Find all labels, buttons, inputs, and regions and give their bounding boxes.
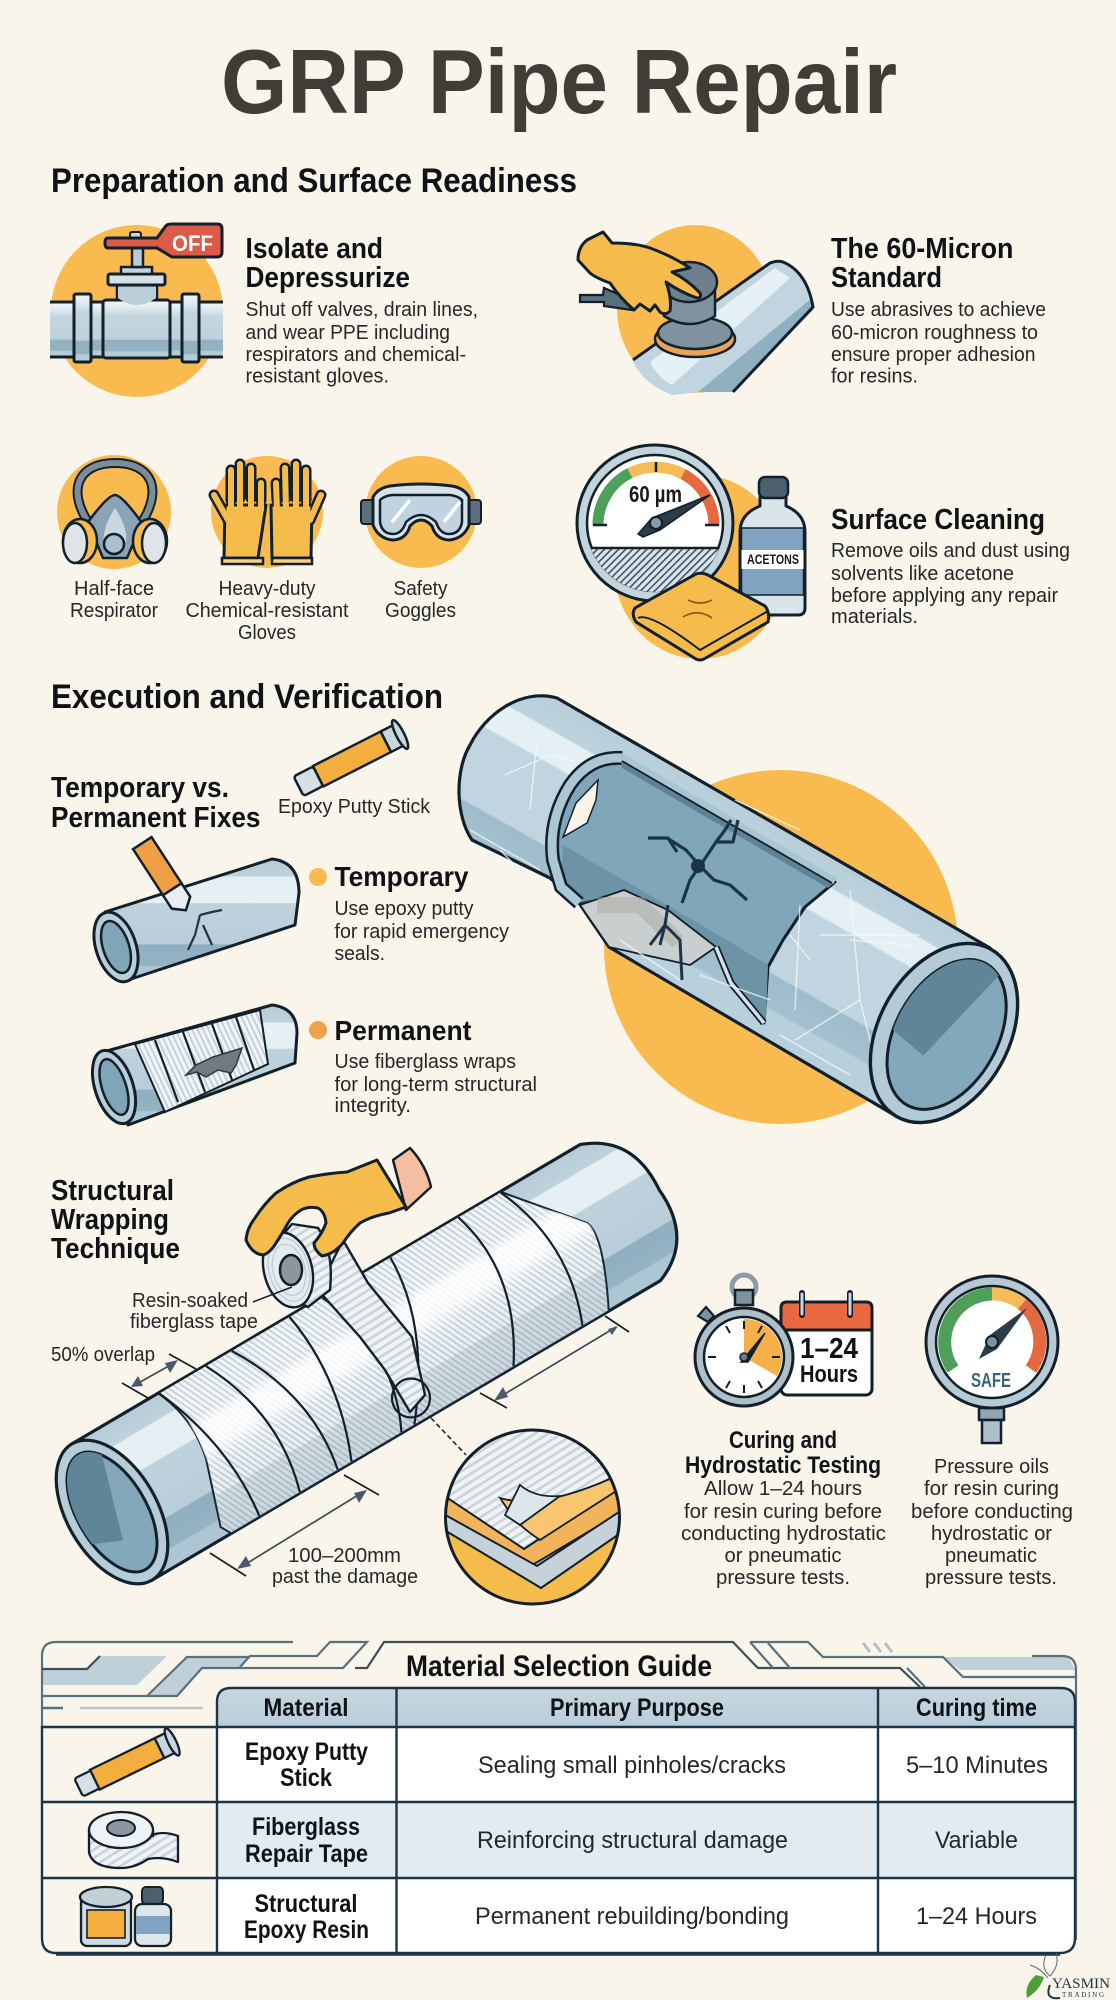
- text: the 60-micron standard: for resins.: [831, 366, 918, 388]
- crack: [648, 820, 747, 903]
- table row: fiberglass repair tape: Fiberglass: [252, 1813, 360, 1841]
- heading: structural wrapping technique: Structural: [51, 1175, 174, 1207]
- icon: calendar 1-24 hours: [781, 1293, 872, 1395]
- gloved hand: [246, 1148, 431, 1256]
- callouts: wrapping dimensions: fiberglass tape: [130, 1311, 258, 1333]
- text: permanent: Permanent: [334, 1015, 472, 1046]
- table body: [42, 1688, 1075, 1954]
- icon: calendar 1-24 hours: 1–24: [800, 1333, 858, 1365]
- text: the 60-micron standard: Use abrasives to achieve: [831, 299, 1046, 321]
- text: curing and hydrostatic testing: for resin curing before: [684, 1501, 882, 1523]
- tape roll: [256, 1224, 331, 1313]
- text: permanent: Use fiberglass wraps: [334, 1051, 516, 1073]
- panel: PPE: [57, 455, 481, 644]
- text: pressure tests: hydrostatic or: [931, 1523, 1052, 1545]
- label: epoxy putty stick: Epoxy Putty Stick: [278, 796, 431, 818]
- heading: structural wrapping technique: Wrapping: [51, 1204, 169, 1236]
- detail inset: layers: [440, 1430, 625, 1610]
- text: pressure tests: before conducting: [911, 1501, 1073, 1523]
- table row: structural epoxy resin: [244, 1890, 1037, 1944]
- panel: material selection guide table: [42, 1642, 1076, 1954]
- labels: PPE items: [70, 578, 456, 644]
- heading: structural wrapping technique: Technique: [51, 1233, 180, 1265]
- logo: yasmin trading: TRADING: [1062, 1991, 1104, 1999]
- text: isolate and depressurize: resistant gloves.: [246, 366, 389, 388]
- icon: resin jar and bottle: [80, 1887, 171, 1946]
- labels: PPE items: Gloves: [238, 622, 296, 644]
- table title: Material Selection Guide: [406, 1650, 712, 1683]
- text: the 60-micron standard: 60-micron roughness to: [831, 322, 1038, 344]
- text: surface cleaning: solvents like acetone: [831, 563, 1014, 585]
- icon: sander on pipe: [578, 225, 813, 395]
- heading: structural wrapping technique: [51, 1175, 180, 1265]
- labels: PPE items: Safety: [394, 578, 448, 600]
- orange backdrop circle: [604, 770, 958, 1124]
- panel: structural wrapping technique: [51, 1142, 678, 1606]
- text: the 60-micron standard: Standard: [831, 262, 942, 294]
- text: pressure tests: for resin curing: [924, 1478, 1059, 1500]
- table row: epoxy putty stick: Sealing small pinholes/cracks: [478, 1752, 786, 1779]
- panel: cracked pipe cutaway: [459, 696, 1048, 1149]
- table text: header row: Material: [264, 1694, 348, 1722]
- text: isolate and depressurize: Isolate and: [246, 233, 383, 265]
- table row: epoxy putty stick: [245, 1738, 1048, 1792]
- table row: structural epoxy resin: 1–24 Hours: [916, 1903, 1037, 1930]
- text: temporary: [309, 861, 509, 965]
- text: permanent: [309, 1015, 537, 1117]
- text: temporary: for rapid emergency: [334, 921, 509, 943]
- text: isolate and depressurize: and wear PPE including: [246, 322, 450, 344]
- heading: temporary vs permanent: [51, 772, 260, 834]
- table text: header row: Curing time: [916, 1694, 1037, 1722]
- callouts: wrapping dimensions: past the damage: [272, 1566, 418, 1588]
- icon: gauge, acetone bottle and cloth: 60 µm: [629, 481, 682, 507]
- icon: pipe with epoxy putty: [86, 837, 299, 987]
- text: isolate and depressurize: Depressurize: [246, 262, 410, 294]
- icon: epoxy putty stick: [291, 718, 411, 800]
- logo: yasmin trading: YASMIN: [1052, 1976, 1110, 1992]
- panel: curing and hydrostatic testing: [681, 1275, 1073, 1589]
- table row: fiberglass repair tape: Reinforcing structural damage: [477, 1827, 788, 1854]
- wrapped pipe: [54, 1142, 678, 1586]
- labels: PPE items: Chemical-resistant: [186, 600, 349, 622]
- panel: the 60-micron standard: [578, 225, 1046, 395]
- labels: PPE items: Half-face: [74, 578, 154, 600]
- icon: safety goggles: [361, 456, 481, 568]
- table row: structural epoxy resin: Permanent rebuilding/bonding: [475, 1903, 789, 1930]
- callouts: wrapping dimensions: 100–200mm: [288, 1545, 401, 1567]
- heading: temporary vs permanent: Permanent Fixes: [51, 802, 260, 834]
- labels: PPE items: Respirator: [70, 600, 158, 622]
- icon: half-face respirator: [57, 455, 171, 569]
- table row: fiberglass repair tape: [245, 1813, 1018, 1868]
- callouts: wrapping dimensions: [51, 1287, 629, 1588]
- text: isolate and depressurize: respirators and chemical-: [246, 344, 466, 366]
- table row: epoxy putty stick: Stick: [280, 1764, 332, 1792]
- panel: isolate and depressurize: [50, 224, 478, 397]
- text: temporary: Use epoxy putty: [334, 898, 474, 920]
- table text: header row: [264, 1694, 1037, 1722]
- text: pressure tests: [911, 1456, 1073, 1589]
- icon: fiberglass tape roll: [89, 1812, 178, 1868]
- heading: preparation and surface readiness: Preparation and Surface Readiness: [51, 162, 577, 200]
- text: curing and hydrostatic testing: Allow 1–24 hours: [704, 1478, 862, 1500]
- icon: stopwatch: [695, 1275, 793, 1406]
- text: the 60-micron standard: ensure proper adhesion: [831, 344, 1036, 366]
- text: pressure tests: Pressure oils: [934, 1456, 1049, 1478]
- cutaway window: [550, 757, 835, 1023]
- icon: gauge, acetone bottle and cloth: ACETONS: [747, 552, 799, 567]
- text: permanent: for long-term structural: [334, 1074, 537, 1096]
- text: curing and hydrostatic testing: pressure tests.: [716, 1567, 850, 1589]
- text: curing and hydrostatic testing: [681, 1427, 886, 1589]
- icon: pressure gauge safe: SAFE: [971, 1370, 1011, 1392]
- table row: epoxy putty stick: Epoxy Putty: [245, 1738, 368, 1766]
- icon: gauge, acetone bottle and cloth: [577, 445, 805, 660]
- table row: fiberglass repair tape: Repair Tape: [245, 1840, 368, 1868]
- labels: PPE items: Goggles: [385, 600, 456, 622]
- callouts: wrapping dimensions: 50% overlap: [51, 1344, 155, 1366]
- icon: chemical-resistant gloves: [211, 456, 323, 568]
- text: pressure tests: pneumatic: [945, 1545, 1037, 1567]
- panel: surface cleaning: [577, 445, 1070, 660]
- icon: pipe with fiberglass wrap: [84, 1005, 297, 1129]
- text: curing and hydrostatic testing: conducting hydrostatic: [681, 1523, 886, 1545]
- pipe body: [459, 696, 990, 1116]
- icon: calendar 1-24 hours: Hours: [800, 1361, 858, 1388]
- callouts: wrapping dimensions: Resin-soaked: [132, 1290, 248, 1312]
- text: surface cleaning: before applying any repair: [831, 585, 1058, 607]
- text: surface cleaning: Surface Cleaning: [831, 504, 1045, 536]
- text: the 60-micron standard: The 60-Micron: [831, 233, 1014, 265]
- text: surface cleaning: Remove oils and dust using: [831, 540, 1070, 562]
- table header decoration: [42, 1642, 1076, 1940]
- icon: epoxy stick: [72, 1727, 182, 1801]
- icon: shut-off valve: [50, 224, 223, 397]
- fiber scratches: [470, 740, 920, 1075]
- logo: yasmin trading: [1026, 1953, 1110, 1999]
- heading: execution and verification: Execution and Verification: [51, 678, 443, 716]
- tape strip unrolling from roll: [318, 1240, 425, 1412]
- text: curing and hydrostatic testing: Curing and: [729, 1427, 837, 1454]
- text: temporary: Temporary: [334, 861, 469, 892]
- table row: structural epoxy resin: Epoxy Resin: [244, 1916, 369, 1944]
- title: GRP Pipe Repair: [221, 32, 897, 133]
- text: the 60-micron standard: [831, 233, 1046, 388]
- table row: epoxy putty stick: 5–10 Minutes: [906, 1752, 1048, 1779]
- text: curing and hydrostatic testing: or pneumatic: [724, 1545, 842, 1567]
- text: temporary: seals.: [334, 943, 385, 965]
- text: isolate and depressurize: [246, 233, 478, 388]
- heading: temporary vs permanent: Temporary vs.: [51, 772, 229, 804]
- icon: pressure gauge safe: [926, 1276, 1058, 1443]
- text: permanent: integrity.: [334, 1095, 411, 1117]
- table row: structural epoxy resin: Structural: [254, 1890, 358, 1918]
- text: pressure tests: pressure tests.: [925, 1567, 1057, 1589]
- text: curing and hydrostatic testing: Hydrostatic Testing: [685, 1452, 881, 1479]
- text: isolate and depressurize: Shut off valves, drain lines,: [246, 299, 478, 321]
- table text: header row: Primary Purpose: [550, 1694, 724, 1722]
- panel: temporary vs permanent fixes: [51, 718, 537, 1129]
- text: surface cleaning: materials.: [831, 606, 918, 628]
- table row: fiberglass repair tape: Variable: [935, 1827, 1018, 1854]
- labels: PPE items: Heavy-duty: [218, 578, 316, 600]
- icon: shut-off valve: OFF: [172, 231, 213, 256]
- text: surface cleaning: [831, 504, 1070, 628]
- pipe open end: [868, 942, 1020, 1124]
